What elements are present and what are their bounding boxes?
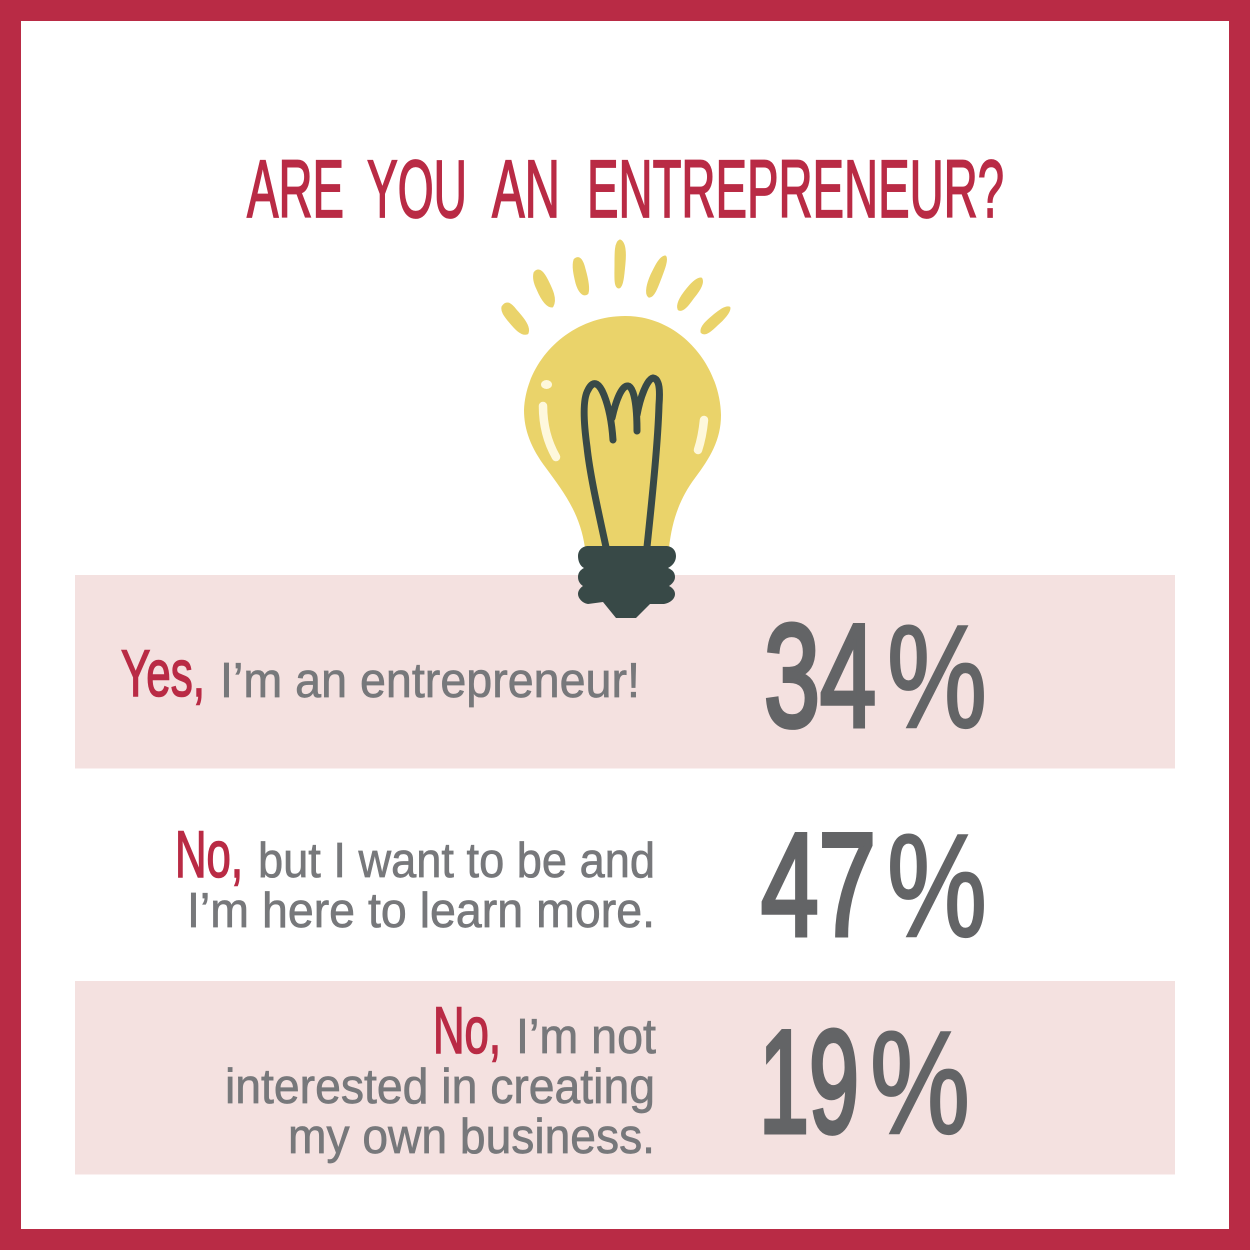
panel: yes row background	[75, 575, 1175, 768]
row 1: answer text: I’m an entrepreneur!	[220, 654, 640, 708]
panel: not interested row background	[75, 981, 1175, 1174]
icon: screw base	[578, 546, 676, 618]
row 3: answer text	[225, 993, 656, 1164]
icon: light rays	[503, 241, 729, 333]
title: YOU	[367, 144, 467, 235]
title: AN	[492, 144, 560, 235]
row 1: answer text	[121, 636, 640, 710]
title	[247, 144, 1004, 235]
row 3: percentage: %	[870, 1001, 970, 1164]
icon: glass bulb	[524, 316, 721, 548]
row 2: answer text: but I want to be and	[258, 834, 655, 888]
row 1: percentage: 34	[764, 594, 876, 757]
row 3: answer text: interested in creating	[225, 1060, 655, 1114]
icon: light bulb	[503, 241, 729, 618]
row 2: percentage: %	[887, 804, 987, 967]
icon: highlights	[541, 380, 704, 457]
row 2: answer text: No,	[175, 817, 243, 891]
row 1: answer text: Yes,	[121, 636, 205, 710]
row 3: percentage: 19	[759, 1000, 859, 1163]
title: ARE	[247, 144, 344, 235]
row 2: answer text: I’m here to learn more.	[187, 884, 655, 938]
row 3: answer text: No,	[433, 993, 501, 1067]
row 2: answer text	[175, 817, 655, 938]
row 2: percentage: 47	[761, 803, 876, 966]
row 3: answer text: my own business.	[288, 1110, 655, 1164]
icon: filament	[584, 378, 659, 547]
row 1: percentage: %	[887, 595, 987, 758]
row 3: answer text: I’m not	[516, 1010, 656, 1064]
